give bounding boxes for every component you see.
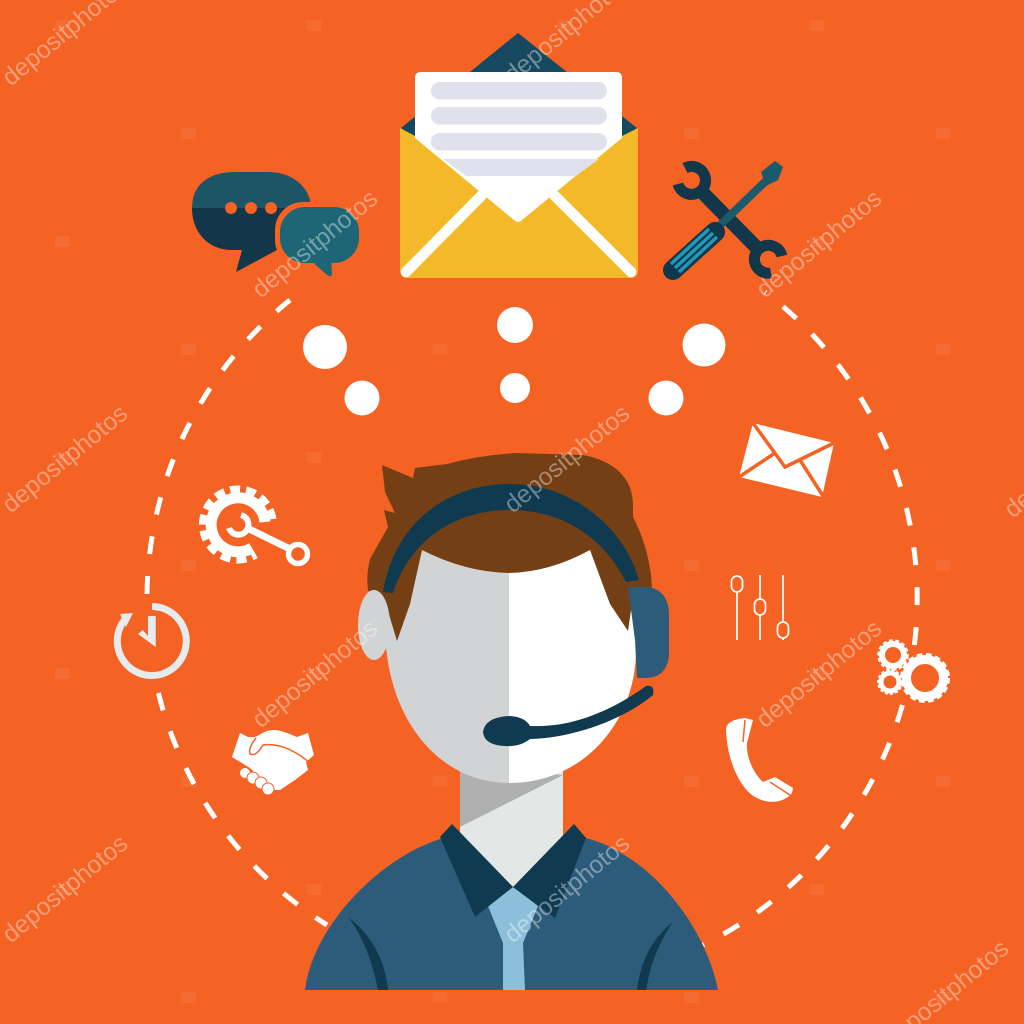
face left half [385, 530, 509, 783]
watermarks: depositphotos [0, 400, 133, 519]
dashed circle [147, 292, 917, 945]
arm creases [348, 917, 673, 990]
watermarks: depositphotos [751, 615, 887, 734]
icon: gear with wrench [202, 489, 308, 564]
icon: mail [739, 423, 834, 497]
icon: clock [117, 606, 186, 675]
ear [358, 590, 390, 660]
earpiece [628, 587, 669, 678]
neck shadow [460, 765, 563, 827]
watermarks: depositphotos [0, 830, 133, 949]
icon: wrench and screwdriver [671, 161, 783, 273]
neck [460, 765, 563, 887]
face right half [509, 530, 636, 783]
watermarks: depositphotos [247, 615, 383, 734]
white dots [303, 307, 726, 416]
watermarks: depositphotos [499, 830, 635, 949]
icon: gears [878, 641, 948, 700]
icon: phone [726, 718, 793, 802]
hair [367, 453, 652, 641]
icon: open envelope with letter [400, 33, 638, 278]
icon: speech bubbles [192, 172, 364, 276]
tie [488, 887, 538, 990]
body [305, 838, 718, 990]
headband [383, 484, 639, 593]
collar [440, 824, 586, 918]
icon: sliders [732, 575, 788, 640]
microphone [483, 686, 653, 746]
watermarks: depositphotos [247, 185, 383, 304]
person with headset [305, 453, 718, 990]
watermarks: depositphotos [499, 400, 635, 519]
icon: handshake [232, 730, 314, 795]
watermarks: depositphotos [751, 185, 887, 304]
